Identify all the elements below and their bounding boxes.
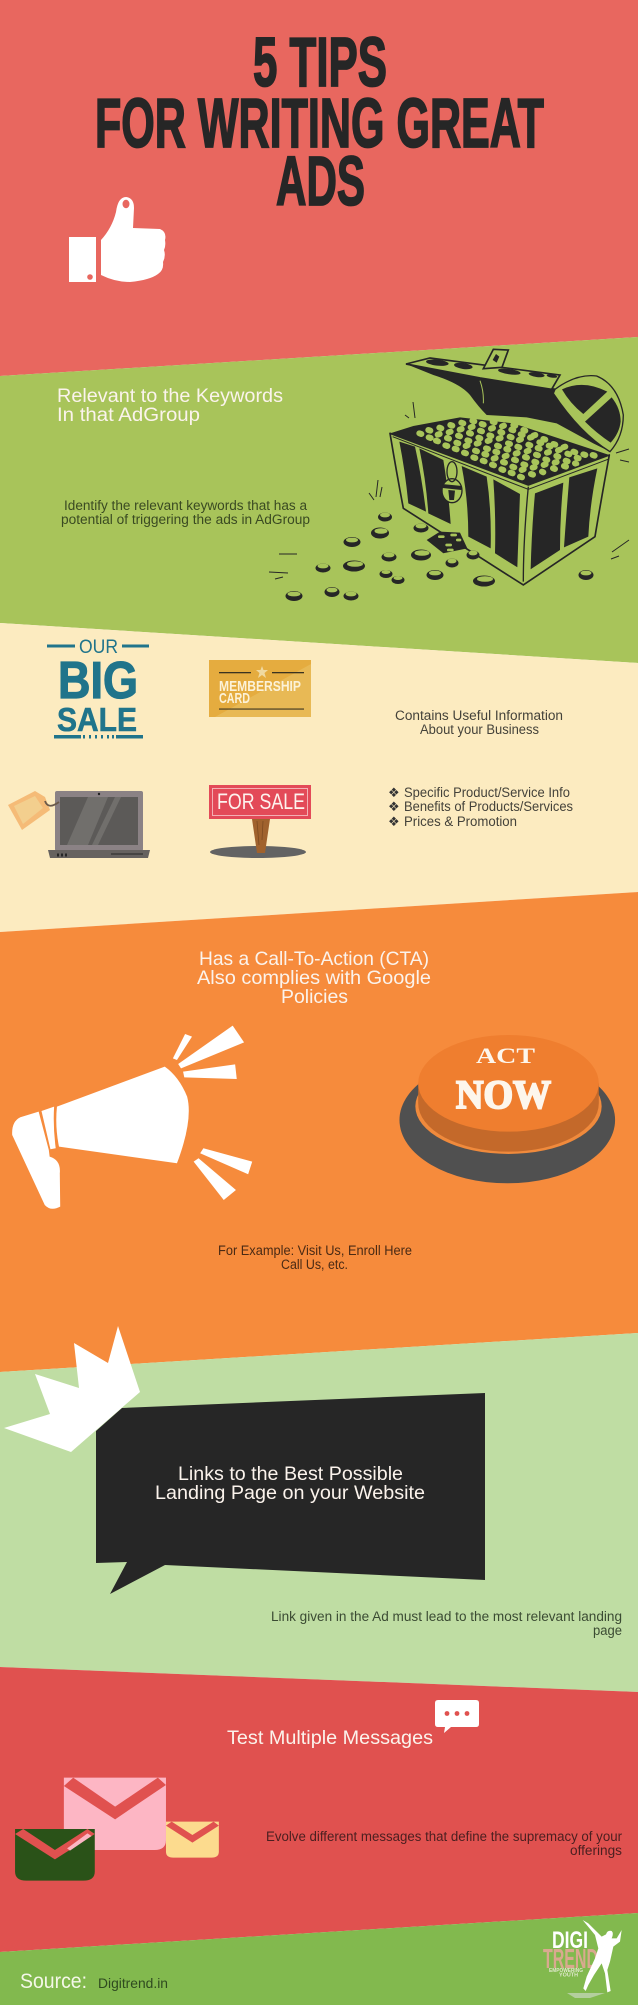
icon: scattered coins [286, 512, 594, 601]
text: bullet list: Prices & Promotion [404, 814, 517, 829]
icon: thumbs up [69, 197, 165, 282]
logo: digitrend: EMPOWERING [549, 1968, 583, 1974]
text: cta examples [218, 1243, 412, 1272]
text: bullet list: Specific Product/Service Info [404, 785, 570, 800]
text: evolve messages: Evolve different messages that define the supremacy of your [266, 1829, 622, 1844]
text: now: NOW [456, 1072, 551, 1117]
icon: act now button [399, 1035, 615, 1183]
icon: treasure chest [390, 349, 623, 585]
callout: speech bubble [96, 1393, 485, 1594]
logo: digitrend: YOUTH [559, 1972, 578, 1978]
text: act: ACT [476, 1043, 535, 1068]
text: evolve messages [266, 1829, 622, 1858]
text: bullet list: Benefits of Products/Services [404, 799, 573, 814]
panel: useful information [0, 623, 638, 932]
text: useful information [395, 708, 563, 737]
icon: our big sale [47, 637, 149, 738]
heading: call to action: Has a Call-To-Action (CTA) [199, 949, 429, 970]
text: landing page note: page [593, 1623, 622, 1638]
icon: chest sparkle lines [269, 402, 629, 579]
text: evolve messages: offerings [570, 1843, 622, 1858]
logo: digitrend: TREND [543, 1943, 598, 1974]
icon: laptop with price tag [8, 791, 150, 858]
icon: membership card [209, 660, 311, 717]
text: bullet list: ❖ [388, 800, 400, 815]
text: source [20, 1970, 168, 1993]
heading: relevant to the keywords: In that AdGroup [57, 405, 200, 426]
text: source: Digitrend.in [98, 1975, 168, 1991]
callout: speech bubble: Links to the Best Possible [178, 1464, 403, 1485]
text: identify keywords [61, 498, 310, 527]
panel: title background [0, 0, 638, 376]
icon: for sale sign [209, 785, 311, 858]
logo: digitrend [543, 1920, 622, 1998]
panel: footer [0, 1913, 638, 2005]
text: bullet list [388, 785, 573, 830]
panel: call to action [0, 892, 638, 1372]
text: landing page note [271, 1609, 622, 1638]
icon: chat bubble [435, 1700, 479, 1733]
heading: call to action [197, 949, 431, 1008]
panel: test multiple messages [0, 1667, 638, 1952]
text: identify keywords: potential of triggering the ads in AdGroup [61, 512, 310, 527]
icon: our big sale: OUR [79, 637, 118, 658]
heading: call to action: Also complies with Google [197, 968, 431, 989]
icon: membership card: CARD [219, 690, 250, 707]
text: identify keywords: Identify the relevant keywords that has a [64, 498, 307, 513]
icon: our big sale: SALE [57, 701, 137, 738]
icon: megaphone [12, 1026, 252, 1209]
text: useful information: About your Business [420, 722, 539, 737]
heading: relevant to the keywords [57, 386, 283, 426]
panel: landing page [0, 1333, 638, 1692]
callout: speech bubble: Landing Page on your Website [155, 1483, 425, 1504]
icon: our big sale: BIG [58, 652, 138, 710]
text: cta examples: For Example: Visit Us, Enroll Here [218, 1243, 412, 1258]
text: bullet list: ❖ [388, 815, 400, 830]
heading: test multiple messages: Test Multiple Messages [227, 1728, 433, 1749]
heading: relevant to the keywords: Relevant to the Keywords [57, 386, 283, 407]
text: useful information: Contains Useful Information [395, 708, 563, 723]
icon: for sale sign: FOR SALE [217, 789, 305, 814]
icon: white crown shape [4, 1326, 140, 1452]
text: landing page note: Link given in the Ad must lead to the most relevant landing [271, 1609, 622, 1624]
icon: envelopes [15, 1778, 219, 1881]
icon: membership card: MEMBERSHIP [219, 678, 301, 695]
heading: call to action: Policies [281, 987, 348, 1008]
title: ADS [276, 142, 365, 220]
panel: relevant keywords [0, 337, 638, 663]
title [95, 23, 544, 220]
logo: digitrend: DIGI [552, 1927, 588, 1954]
text: cta examples: Call Us, etc. [281, 1257, 348, 1272]
text: bullet list: ❖ [388, 786, 400, 801]
title: 5 TIPS [253, 23, 387, 101]
text: source: Source: [20, 1970, 87, 1993]
